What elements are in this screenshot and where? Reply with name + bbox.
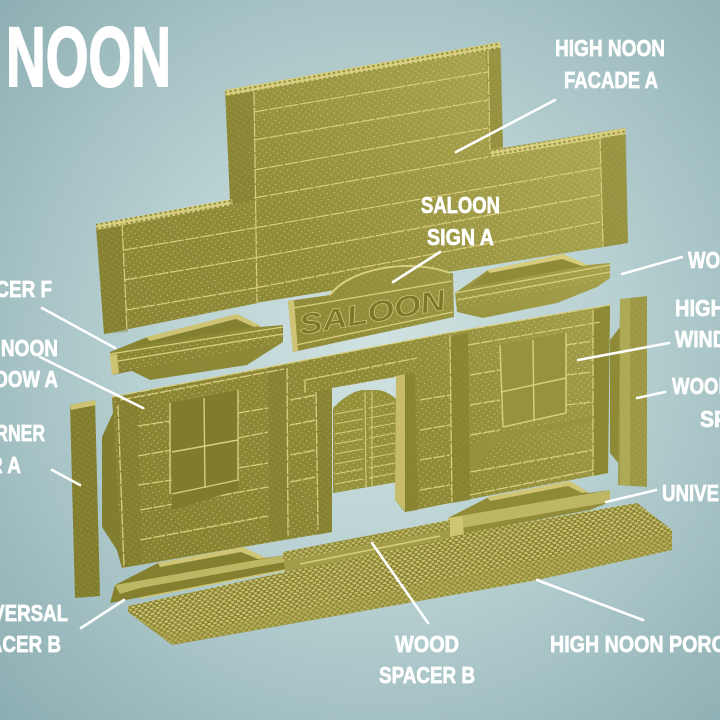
part: universal spacer B [110,547,285,603]
label: wood: WOOD [395,631,459,657]
label: sign A: SIGN A [427,224,494,250]
title: NOON [6,10,171,104]
leader lines [40,100,682,628]
label: saloon: SALOON [421,192,500,218]
part: wood spacer B [283,520,450,572]
window right [500,333,566,427]
part: wood corner spacer right [610,296,647,487]
part: right window panel [395,305,610,512]
part: saloon sign A: SALOON [297,284,449,342]
part: wood spacer right [455,254,610,318]
part: high noon facade A [96,42,628,334]
part: saloon sign A [288,266,454,352]
part: high noon porch [128,503,672,645]
part: wood corner spacer A [70,400,100,598]
part: wood spacer F [110,314,283,380]
part: saloon doors [333,390,397,493]
label: spacer B: SPACER B [379,662,475,688]
label: facade A line 2: FACADE A [564,67,658,93]
part: high noon window A [102,333,452,568]
part: universal spacer right [448,481,610,537]
window left [170,390,238,494]
label: high noon facade A: HIGH NOON [555,35,665,61]
